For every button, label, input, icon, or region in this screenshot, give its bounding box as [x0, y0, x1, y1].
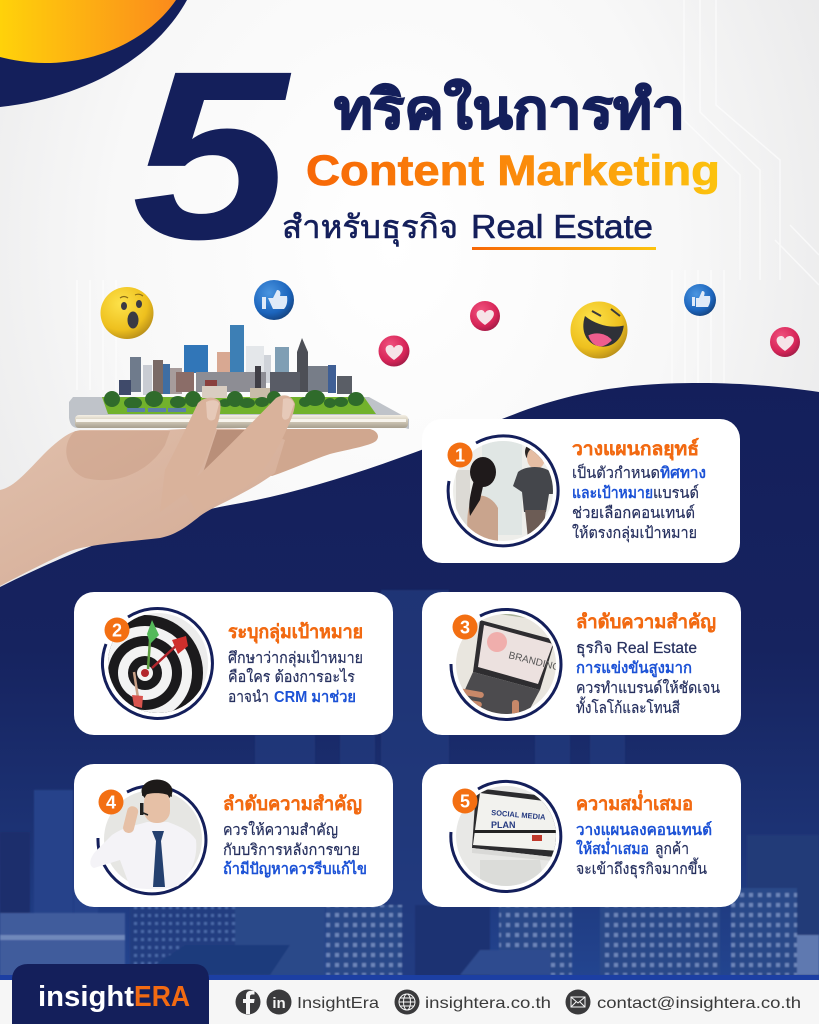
body text: ให้สม่ำเสมอ	[576, 837, 649, 858]
badge 5: 5	[460, 792, 470, 812]
logo box: insight	[38, 981, 134, 1013]
icon: globe	[394, 990, 420, 1014]
top-left corner shape	[0, 0, 187, 107]
heading: ลำดับความสำคัญ	[223, 794, 362, 815]
logo box	[12, 964, 209, 1024]
badge 2: 2	[112, 620, 122, 640]
body text: วางแผนลงคอนเทนต์	[576, 821, 712, 839]
heading: วางแผนกลยุทธ์	[572, 438, 699, 461]
title line 1: ทริคในการทำ	[334, 78, 685, 140]
card 4	[74, 764, 393, 907]
body text: ถ้ามีปัญหาควรรีบแก้ไข	[223, 859, 367, 878]
card 5	[422, 764, 741, 907]
body text	[572, 463, 706, 543]
body text: ลูกค้า	[655, 841, 689, 859]
title line 3 thai: สำหรับธุรกิจ	[282, 209, 458, 247]
body text: เป็นตัวกำหนด	[572, 463, 660, 482]
heading: ระบุกลุ่มเป้าหมาย	[228, 621, 363, 644]
grass screen	[102, 397, 376, 414]
icon: heart 3	[770, 327, 800, 357]
badge 5	[452, 788, 478, 814]
badge 4	[98, 790, 124, 814]
title line 3 latin: Real Estate	[471, 208, 653, 245]
faint towers	[255, 590, 625, 980]
icon: like 2	[684, 284, 716, 316]
shadow between fingers	[195, 430, 268, 497]
badge 1: 1	[455, 446, 465, 466]
body text: ควรทำแบรนด์ให้ชัดเจน	[576, 679, 720, 697]
body text	[576, 821, 712, 879]
photo: team at whiteboard	[453, 441, 553, 541]
body text: แบรนด์	[653, 484, 699, 502]
icon: heart 2	[470, 301, 500, 331]
icon: wow emoji	[100, 287, 154, 339]
icon: mail	[566, 990, 590, 1014]
body text: ควรให้ความสำคัญ	[223, 821, 338, 839]
body text: จะเข้าถึงธุรกิจมากขึ้น	[576, 857, 707, 879]
finger nails	[206, 400, 219, 420]
ring	[98, 786, 206, 894]
body text: ธุรกิจ Real Estate	[576, 640, 697, 658]
palm	[0, 428, 285, 586]
photo: branding laptop: BRANDING	[507, 650, 561, 674]
palm shadow	[66, 431, 170, 480]
body text: กับบริการหลังการขาย	[223, 842, 360, 859]
icon: linkedin	[266, 990, 292, 1014]
body text: ให้ตรงกลุ่มเป้าหมาย	[572, 524, 697, 543]
badge 2	[104, 618, 130, 642]
heading: ความสม่ำเสมอ	[576, 790, 693, 815]
photo: call-center agent	[90, 780, 196, 889]
icon: linkedin: in	[272, 995, 286, 1012]
city on phone	[104, 325, 364, 412]
badge 3	[452, 614, 478, 640]
ring	[448, 436, 558, 546]
body text: และเป้าหมาย	[572, 484, 653, 502]
body text: ศึกษาว่ากลุ่มเป้าหมาย	[228, 650, 363, 668]
photo: branding laptop	[456, 614, 556, 714]
body text: ทิศทาง	[660, 464, 706, 482]
photo: dartboard	[108, 613, 208, 713]
photo background	[104, 790, 202, 888]
icon: facebook	[236, 990, 260, 1014]
card 2	[74, 592, 393, 735]
footer	[0, 964, 819, 1024]
navy wave with city skyline	[0, 380, 819, 980]
ring	[102, 608, 212, 718]
phone	[69, 397, 409, 429]
ring	[451, 609, 561, 719]
trees	[104, 390, 364, 409]
fingers in front of phone	[160, 398, 221, 512]
handle: InsightEra	[297, 995, 379, 1012]
icon: like 1	[254, 280, 294, 320]
hand holding phone	[0, 325, 409, 586]
badge 1	[448, 442, 472, 468]
body text	[228, 650, 363, 706]
body text: ช่วยเลือกคอนเทนต์	[572, 504, 695, 522]
title underline	[472, 247, 656, 250]
body text: คือใคร ต้องการอะไร	[228, 668, 355, 686]
body text: ทั้งโลโก้และโทนสี	[576, 696, 680, 717]
icon: heart 1	[378, 336, 410, 366]
body text: การแข่งขันสูงมาก	[576, 660, 692, 679]
photo: social media plan monitor: SOCIAL MEDIA	[491, 808, 546, 822]
big number 5: 5	[132, 21, 292, 289]
title	[132, 21, 720, 289]
badge 4: 4	[106, 792, 116, 812]
heading: ลำดับความสำคัญ	[576, 612, 716, 633]
front buildings	[0, 888, 819, 978]
logo box: ERA	[134, 981, 190, 1013]
body text	[576, 640, 720, 717]
card 3	[422, 592, 741, 735]
lower fingers behind phone	[230, 429, 378, 476]
card 1	[422, 419, 740, 563]
icon: laugh emoji	[570, 302, 628, 358]
photo: social media plan monitor	[456, 786, 556, 886]
decorative circuit lines	[77, 0, 819, 390]
title line 2: Content Marketing	[306, 147, 720, 195]
email: contact@insightera.co.th	[597, 995, 801, 1012]
ring	[451, 781, 561, 891]
website: insightera.co.th	[425, 995, 551, 1012]
body text	[223, 821, 367, 878]
body text: อาจนำ	[228, 689, 269, 706]
body text: CRM มาช่วย	[274, 689, 356, 706]
photo: social media plan monitor: PLAN	[491, 820, 516, 830]
badge 3: 3	[460, 618, 470, 638]
mid skyline	[0, 790, 819, 980]
